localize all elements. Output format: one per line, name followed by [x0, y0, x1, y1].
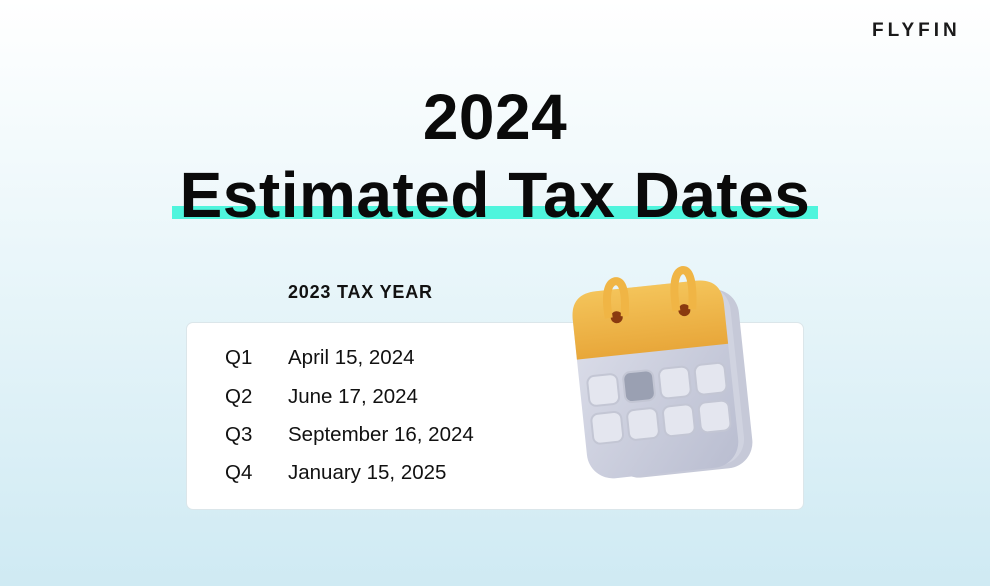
row Q3: [225, 423, 474, 446]
panel: dates table: June 17, 2024: [288, 385, 418, 408]
title text: Estimated Tax Dates: [180, 159, 810, 231]
row Q2: [225, 385, 418, 408]
panel: dates table: Q4: [225, 461, 252, 484]
icon: calendar: [572, 266, 752, 478]
panel: dates table: Q3: [225, 423, 252, 446]
logo: FLYFIN: [872, 20, 961, 41]
title: [172, 81, 818, 231]
panel: dates table: January 15, 2025: [288, 461, 446, 484]
panel: dates table: April 15, 2024: [288, 346, 415, 369]
panel: dates table: Q2: [225, 385, 252, 408]
panel: dates table: September 16, 2024: [288, 423, 474, 446]
row Q1: [225, 346, 415, 369]
title text: [180, 81, 810, 231]
row Q4: [225, 461, 446, 484]
highlight bar: [172, 206, 818, 219]
title text: 2024: [423, 81, 567, 153]
panel: dates table: Q1: [225, 346, 252, 369]
panel: dates table: [186, 322, 804, 510]
subheading: 2023 TAX YEAR: [288, 282, 433, 302]
